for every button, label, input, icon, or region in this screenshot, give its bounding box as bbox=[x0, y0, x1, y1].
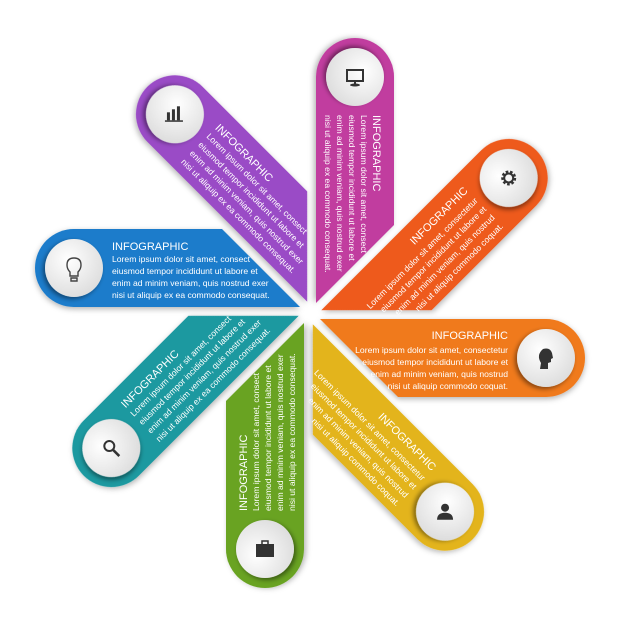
petal: purple (top-left): nisi ut aliquip ex ea commodo consequat. bbox=[179, 157, 298, 275]
petal: green (bottom) bbox=[226, 323, 304, 588]
petal: purple (top-left) bbox=[120, 59, 362, 302]
petal: green (bottom): Lorem ipsum dolor sit amet, consect bbox=[251, 372, 261, 511]
petal: magenta (top) bbox=[316, 38, 394, 303]
petal: teal (bottom-left): eiusmod tempor incididunt ut labore et bbox=[137, 316, 247, 427]
petal: purple (top-left): eiusmod tempor incididunt ut labore et bbox=[196, 140, 307, 250]
petal: green (bottom): eiusmod tempor incididunt ut labore et bbox=[263, 365, 273, 511]
petal: yellow (bottom-right): enim ad minim veniam, quis nostrud bbox=[306, 395, 411, 500]
petal: teal (bottom-left): INFOGRAPHIC bbox=[119, 348, 182, 411]
petal: orange (right): INFOGRAPHIC bbox=[432, 330, 508, 342]
petal: teal (bottom-left): Lorem ipsum dolor sit amet, consect bbox=[128, 313, 233, 418]
petal: purple (top-left): Lorem ipsum dolor sit amet, consect bbox=[205, 131, 310, 236]
petal: blue (left): Lorem ipsum dolor sit amet, consect bbox=[112, 254, 251, 264]
petal: orange (right): nisi ut aliquip commodo coquat. bbox=[388, 381, 508, 391]
petal: orange (right): enim ad minim veniam, quis nostrud bbox=[370, 369, 508, 379]
petal: green (bottom): enim ad minim veniam, quis nostrud exer bbox=[275, 354, 285, 511]
petal: blue (left): enim ad minim veniam, quis nostrud exer bbox=[112, 278, 269, 288]
petal: orange-red (top-right): INFOGRAPHIC bbox=[408, 185, 471, 248]
petal: orange-red (top-right): nisi ut aliquip commodo coquat. bbox=[413, 221, 505, 313]
petal: orange-red (top-right): enim ad minim veniam, quis nostrud bbox=[392, 212, 497, 317]
petal: teal (bottom-left): enim ad minim veniam, quis nostrud exer bbox=[145, 317, 263, 435]
petal: orange (right): Lorem ipsum dolor sit amet, consectetur bbox=[355, 345, 508, 355]
petal: yellow (bottom-right): Lorem ipsum dolor sit amet, consectetur bbox=[312, 368, 427, 483]
petal: orange (right): eiusmod tempor incididunt ut labore et bbox=[362, 357, 509, 367]
petal: orange (right) bbox=[320, 319, 585, 397]
petal: blue (left) bbox=[35, 229, 300, 307]
petal: blue (left): INFOGRAPHIC bbox=[112, 241, 188, 253]
petal: purple (top-left): INFOGRAPHIC bbox=[212, 122, 275, 185]
petal: yellow (bottom-right): INFOGRAPHIC bbox=[375, 411, 438, 474]
petal: orange-red (top-right): Lorem ipsum dolor sit amet, consectetur bbox=[365, 196, 480, 311]
petal: orange-red (top-right) bbox=[321, 123, 564, 365]
petal: green (bottom): INFOGRAPHIC bbox=[238, 435, 250, 511]
petal: orange-red (top-right): eiusmod tempor incididunt ut labore et bbox=[378, 204, 489, 314]
petal: purple (top-left): enim ad minim veniam, quis nostrud exer bbox=[188, 148, 306, 266]
petal: yellow (bottom-right) bbox=[258, 324, 500, 567]
petal: magenta (top): enim ad minim veniam, quis nostrud exer bbox=[335, 115, 345, 272]
petal: teal (bottom-left) bbox=[56, 261, 299, 503]
petal: blue (left): nisi ut aliquip ex ea commodo consequat. bbox=[112, 290, 270, 300]
petal: blue (left): eiusmod tempor incididunt ut labore et bbox=[112, 266, 258, 276]
petal: magenta (top): eiusmod tempor incididunt ut labore et bbox=[347, 115, 357, 261]
petal: magenta (top): INFOGRAPHIC bbox=[370, 115, 382, 191]
petal: yellow (bottom-right): nisi ut aliquip commodo coquat. bbox=[310, 416, 402, 508]
petal: green (bottom): nisi ut aliquip ex ea commodo consequat. bbox=[287, 353, 297, 511]
petal: magenta (top): Lorem ipsum dolor sit amet, consect bbox=[359, 115, 369, 254]
petal: magenta (top): nisi ut aliquip ex ea commodo consequat. bbox=[323, 115, 333, 273]
petal: teal (bottom-left): nisi ut aliquip ex ea commodo consequat. bbox=[154, 325, 272, 444]
petal: yellow (bottom-right): eiusmod tempor incididunt ut labore et bbox=[309, 381, 419, 492]
